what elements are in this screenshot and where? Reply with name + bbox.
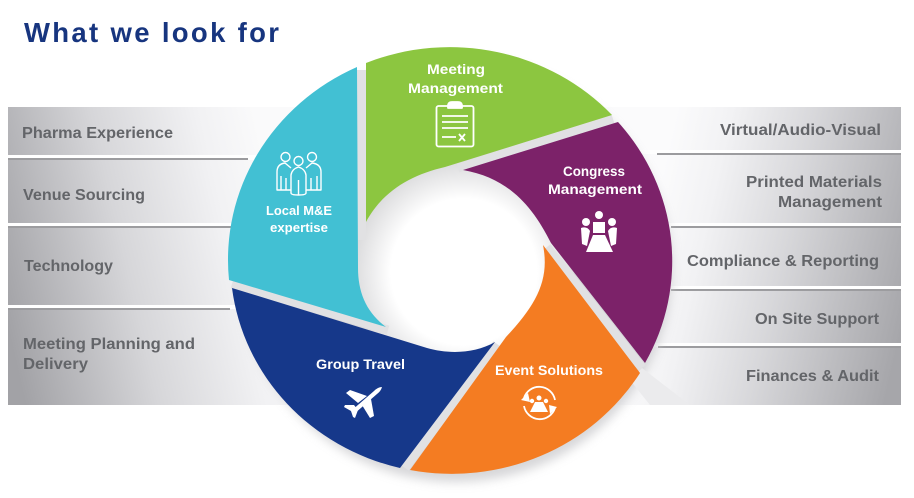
label: Meeting Management: [408, 62, 504, 96]
label: Printed Materials Management: Management: [778, 194, 883, 211]
label: Compliance & Reporting: Compliance & Reporting: [687, 253, 879, 270]
segment: Local M&E expertise: [228, 67, 386, 327]
panel: ring segments: [228, 47, 672, 474]
segment: Event Solutions: [410, 245, 640, 474]
panel: ring segment gaps: [232, 70, 642, 468]
label: Pharma Experience: Pharma Experience: [22, 125, 173, 142]
label: Event Solutions: Event Solutions: [495, 363, 603, 378]
panel: left capability bars: [8, 107, 308, 405]
label: Local M&E expertise: expertise: [270, 221, 328, 235]
label: Technology: Technology: [24, 258, 113, 275]
panel: right capability bars: [600, 107, 901, 405]
segment: Congress Management: [463, 122, 672, 363]
label: Meeting Management: Meeting: [427, 62, 485, 77]
label: Congress Management: [548, 164, 643, 197]
label: Local M&E expertise: Local M&E: [266, 204, 332, 218]
icon: clipboard: [436, 102, 474, 146]
label: Printed Materials Management: [746, 174, 883, 211]
label: Group Travel: Group Travel: [316, 357, 405, 372]
ring centre: [342, 148, 574, 380]
label: Congress Management: Management: [548, 182, 643, 197]
label: Local M&E expertise: [266, 204, 332, 235]
segment: Meeting Management: [366, 47, 612, 222]
icon: group of people: [277, 152, 321, 195]
icon: cycle with people: [521, 387, 557, 419]
label: Meeting Planning and Delivery: [23, 336, 195, 373]
label: Virtual/Audio-Visual: Virtual/Audio-Visual: [720, 122, 881, 139]
label: Meeting Management: Management: [408, 81, 504, 96]
label: Finances & Audit: Finances & Audit: [746, 368, 880, 385]
icon: people at table: [581, 211, 617, 252]
segment: Group Travel: [232, 288, 495, 468]
label: Congress Management: Congress: [563, 164, 625, 179]
title: What we look for: [24, 17, 279, 48]
label: Meeting Planning and Delivery: Meeting Planning and: [23, 336, 195, 353]
icon: airplane: [344, 387, 382, 418]
ring shadow: [240, 58, 672, 482]
label: Printed Materials Management: Printed Materials: [746, 174, 882, 191]
label: Meeting Planning and Delivery: Delivery: [23, 356, 88, 373]
label: On Site Support: On Site Support: [755, 311, 880, 328]
light wedge below ring: [630, 368, 690, 405]
label: Venue Sourcing: Venue Sourcing: [23, 187, 145, 204]
